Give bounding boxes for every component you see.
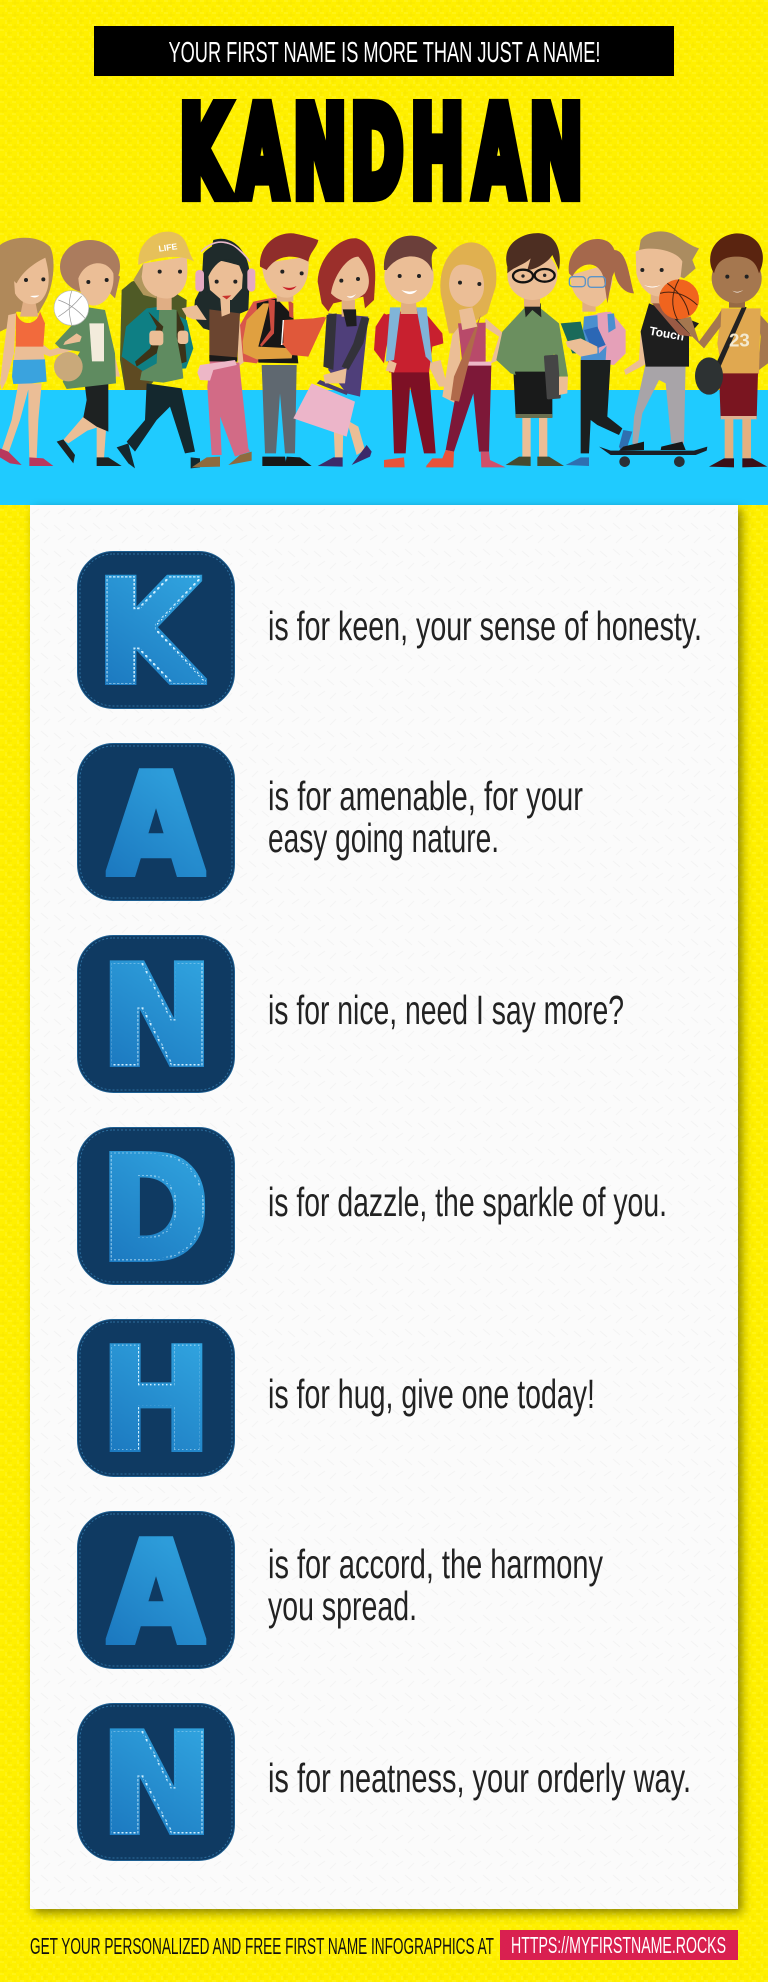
footer <box>30 1930 738 1960</box>
person: boy in red shirt <box>374 236 453 467</box>
text: A meaning: is for amenable, for your <box>268 773 583 819</box>
text: A meaning: you spread. <box>268 1583 417 1629</box>
person: girl with pink bag <box>293 238 375 467</box>
panel: letters card <box>30 505 738 1909</box>
person: boy with cap and backpack: LIFE <box>158 241 178 254</box>
people left half <box>0 232 375 468</box>
row A2: icon and meaning <box>78 1512 603 1676</box>
person: girl with volleyball <box>54 240 122 466</box>
icon: letter N tile: N <box>100 1704 213 1865</box>
icon: letter K tile: K <box>96 549 205 716</box>
person: boy with tank top and bag <box>677 233 768 467</box>
text: A meaning <box>268 1541 603 1629</box>
text: A meaning <box>268 773 583 861</box>
person: boy with cap and backpack <box>117 232 200 468</box>
row D: icon and meaning <box>78 1125 667 1293</box>
illustration: group of young people <box>0 231 768 468</box>
icon: letter A tile: A <box>108 744 204 908</box>
person: boy with glasses <box>496 233 568 466</box>
icon: letter H tile: H <box>100 1319 212 1483</box>
row N: icon and meaning <box>78 936 624 1097</box>
text: N meaning: is for nice, need I say more? <box>268 987 624 1033</box>
person: boy on skateboard with basketball <box>599 231 707 467</box>
text: H meaning: is for hug, give one today! <box>268 1371 595 1417</box>
people right half <box>374 231 768 467</box>
text: A meaning: is for accord, the harmony <box>268 1541 603 1587</box>
icon: letter A tile: A <box>108 1512 204 1676</box>
row K: icon and meaning <box>78 549 702 716</box>
title: name: KANDHAN <box>180 82 583 226</box>
person: girl with tablet and ponytail <box>561 239 634 466</box>
person: blonde girl <box>426 242 507 467</box>
icon: letter A tile <box>78 1512 234 1676</box>
person: boy with red book <box>240 233 327 466</box>
icon: letter N tile: N <box>100 936 213 1097</box>
person: boy on skateboard with basketball: Touch <box>648 324 685 344</box>
text: A meaning: easy going nature. <box>268 815 499 861</box>
icon: letter D tile: D <box>100 1125 209 1293</box>
row N2: icon and meaning <box>78 1704 691 1865</box>
top banner <box>94 26 674 76</box>
person: girl in orange top <box>0 238 80 466</box>
person: girl with headphones <box>182 239 255 467</box>
icon: letter A tile <box>78 744 234 908</box>
person: boy with tank top and bag: 23 <box>729 330 750 351</box>
row H: icon and meaning <box>78 1319 595 1483</box>
row A: icon and meaning <box>78 744 583 908</box>
floor band <box>0 390 768 505</box>
